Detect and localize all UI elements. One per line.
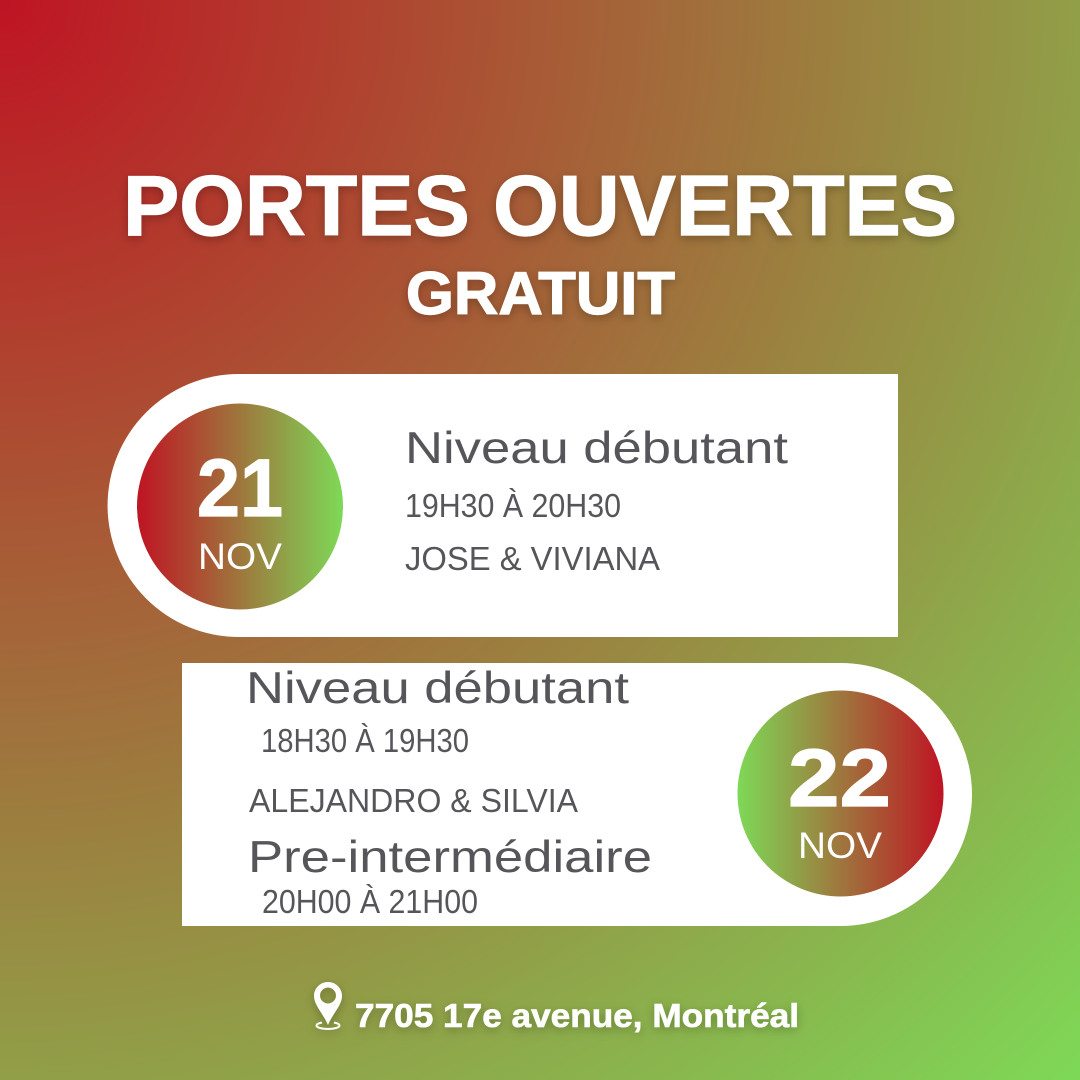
card background [108,374,898,637]
session details: 20H00 À 21H00 [262,883,478,920]
card background [182,663,972,926]
session details: 18H30 À 19H30 [261,722,469,759]
date badge: 21 NOV: 21 [197,443,283,534]
session details: Pre-intermédiaire [248,833,652,882]
session details [405,424,789,577]
session details: JOSE & VIVIANA [405,540,660,577]
date badge: 22 NOV: 22 [788,733,891,824]
title: GRATUIT [406,260,675,327]
session details: ALEJANDRO & SILVIA [249,782,578,819]
date badge: 22 NOV [738,690,944,896]
address [314,982,799,1034]
session details: Niveau débutant [246,664,630,713]
panel: 22 novembre [182,663,972,926]
icon: location pin [314,982,342,1029]
session details [246,664,652,920]
title: PORTES OUVERTES [123,159,957,254]
session details: 19H30 À 20H30 [405,487,621,524]
date badge: 22 NOV: NOV [798,825,882,866]
date badge: 21 NOV: NOV [198,536,282,577]
date badge: 21 NOV [137,404,343,610]
address: 7705 17e avenue, Montréal [355,997,799,1034]
panel: 21 novembre [108,374,898,637]
session details: Niveau débutant [405,424,789,473]
title [123,159,957,327]
